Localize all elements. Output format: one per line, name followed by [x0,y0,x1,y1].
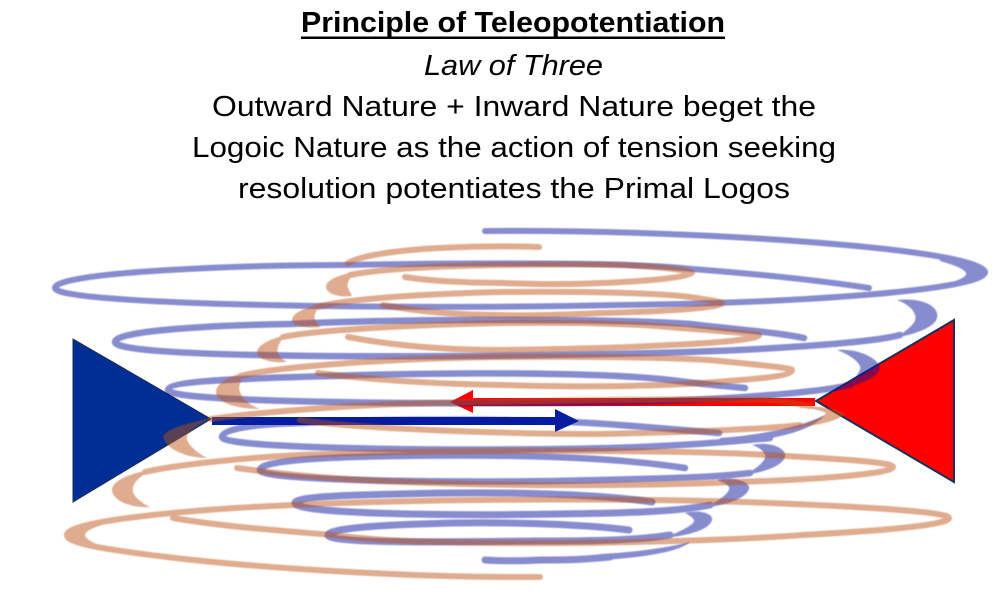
description text: Logoic Nature as the action of tension seeking [192,132,836,164]
description text: Outward Nature + Inward Nature beget the [212,91,816,123]
title: Principle of Teleopotentiation [301,7,725,39]
heading block [192,7,836,205]
red arrow pointing left [450,390,815,413]
blue arrow pointing right [212,409,579,432]
red triangle: inward nature [816,320,954,482]
blue spiral [55,231,986,561]
description text: resolution potentiates the Primal Logos [238,173,790,205]
orange spiral [65,246,949,577]
blue triangle: outward nature [73,339,211,502]
description text [192,91,836,205]
subtitle: Law of Three [424,50,603,82]
